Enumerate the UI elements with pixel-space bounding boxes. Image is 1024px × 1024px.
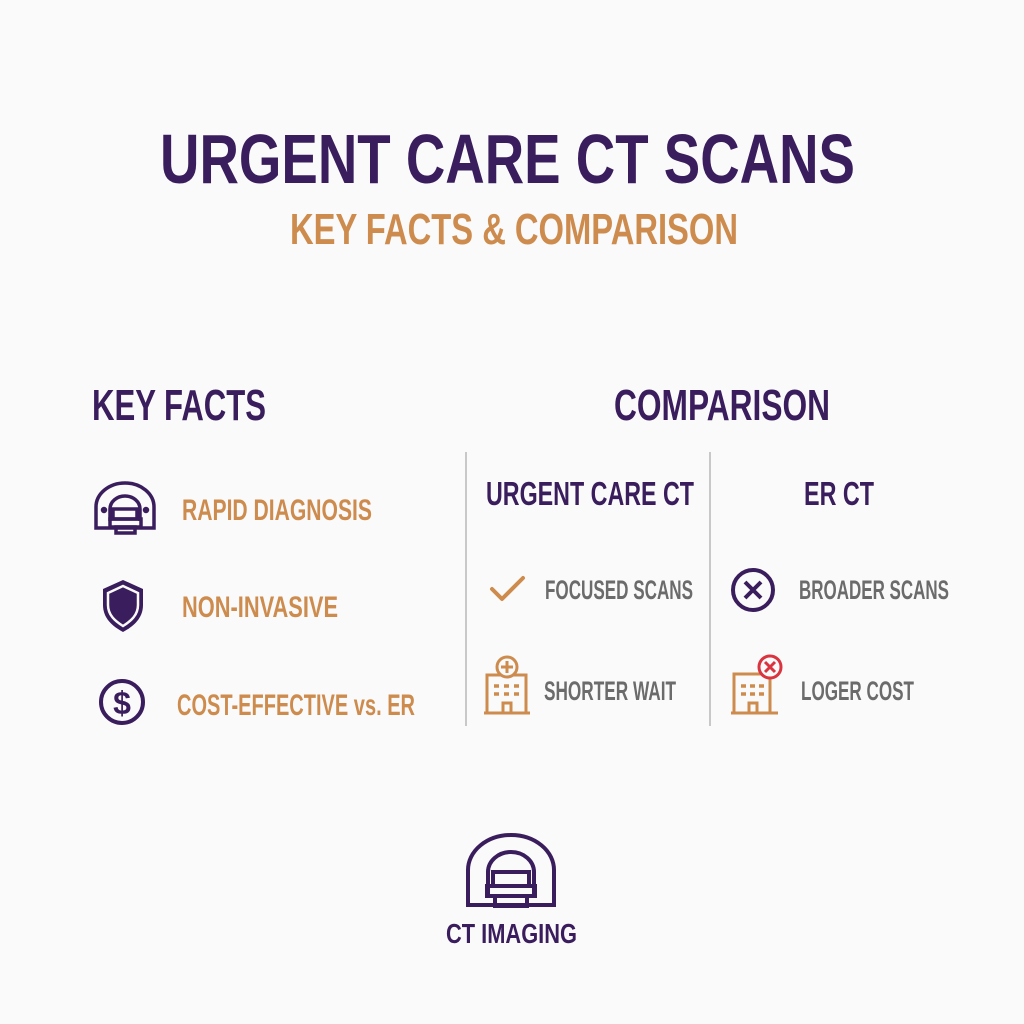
column heading: er ct: ER CT: [804, 475, 874, 512]
row: broader scans: [733, 570, 949, 610]
icon: hospital plus: [484, 657, 530, 713]
bottom icon: ct imaging: CT IMAGING: [446, 918, 577, 949]
bottom icon: ct imaging: [446, 835, 577, 949]
key fact: rapid diagnosis: [96, 483, 372, 533]
icon: hospital x: [731, 656, 781, 713]
heading: key facts: KEY FACTS: [92, 381, 266, 430]
row: longer cost: LOGER COST: [801, 676, 914, 706]
key fact: rapid diagnosis: RAPID DIAGNOSIS: [182, 494, 372, 527]
subtitle: KEY FACTS & COMPARISON: [290, 205, 738, 254]
row: shorter wait: SHORTER WAIT: [544, 676, 676, 706]
icon: ct scanner: [96, 483, 154, 533]
icon: dollar: [101, 681, 143, 723]
row: longer cost: [731, 656, 914, 713]
icon: dollar: $: [113, 685, 131, 721]
key fact: non-invasive: [103, 580, 338, 632]
row: shorter wait: [484, 657, 676, 713]
row: focused scans: [492, 575, 693, 605]
title: URGENT CARE CT SCANS: [160, 120, 855, 198]
heading: comparison: COMPARISON: [614, 381, 830, 430]
column heading: urgent care ct: URGENT CARE CT: [486, 475, 694, 512]
icon: shield: [103, 580, 143, 632]
key fact: cost-effective: COST-EFFECTIVE vs. ER: [177, 689, 415, 722]
row: focused scans: FOCUSED SCANS: [545, 575, 693, 605]
key fact: non-invasive: NON-INVASIVE: [182, 591, 338, 624]
icon: x circle: [733, 570, 773, 610]
key fact: cost-effective: [101, 681, 415, 723]
icon: check: [492, 578, 523, 599]
